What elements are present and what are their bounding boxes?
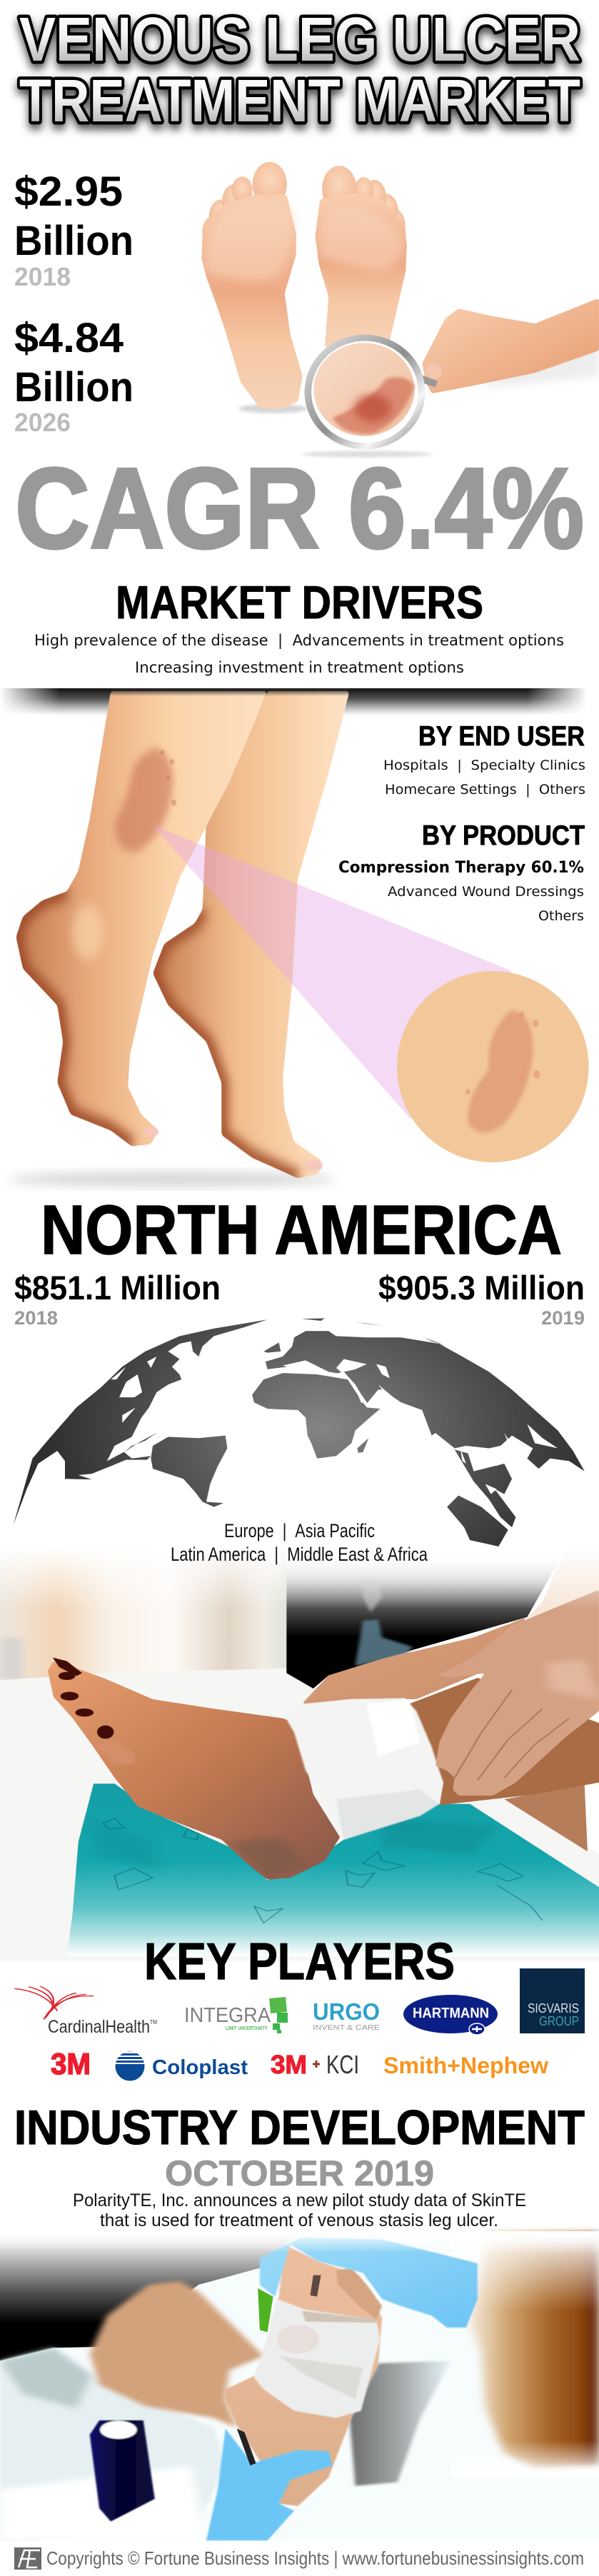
hand underneath [302,1617,527,1704]
dark finger gap [237,2429,256,2465]
illustration: legs with lesion and callout [8,691,589,1187]
logo: hartmann: HARTMANN [413,2006,489,2021]
right leg [153,691,350,1178]
heel blurred [90,2281,263,2427]
logo: smith and nephew: Smith+Nephew [383,2053,548,2078]
logo: urgo: INVENT & CARE [313,2023,380,2032]
photo top fade [0,1547,599,1609]
stat: market size 2026: $4.84 [14,315,124,361]
logo: integra: LIMIT UNCERTAINTY [226,2025,268,2031]
stat: north america 2019: $905.3 Million [378,1269,585,1307]
map: arctic islands [302,1318,447,1347]
upper hand [436,1590,599,1796]
foot sole [226,2244,382,2506]
stat: market size 2026: 2026 [14,408,71,437]
logo: sigvaris group [520,1968,585,2033]
stat: north america 2018 [14,1269,221,1329]
top right arm [527,1549,599,1619]
date: october 2019: OCTOBER 2019 [165,2153,434,2193]
logo: coloplast: Coloplast [152,2056,248,2079]
logo: 3m kci: KCI [326,2050,359,2079]
industry development text [73,2190,526,2230]
logo: cardinal health [14,1986,157,2037]
right leg [409,1678,599,1805]
by product [338,820,585,924]
callout circle with lesion [397,971,589,1162]
bandage roll [90,2420,155,2522]
map: africa [252,1373,380,1459]
left foot [200,162,303,410]
foot [48,1661,340,1880]
market drivers list [34,632,564,676]
logo: cardinal health: CardinalHealth [48,2017,166,2037]
logo: hartmann [403,1995,498,2035]
illustration: feet soles with magnifier and hand [200,162,599,458]
photo: foot with bandage held by hands [0,1547,599,1961]
photo top fade [0,2231,599,2253]
logo: sigvaris group: SIGVARIS [528,2001,579,2016]
toenails [53,1658,114,1739]
right foot [315,166,407,348]
left leg [16,691,268,1147]
lesion on leg [115,748,176,852]
logo: cardinal health: TM [150,2019,157,2026]
heading: key players: KEY PLAYERS [144,1933,455,1991]
dark background [0,2233,298,2361]
regions list [171,1520,428,1565]
gray tray [350,2361,450,2486]
stat: market size 2018: $2.95 [14,168,123,215]
stat: market size 2026: Billion [14,364,134,411]
hand [422,298,599,393]
lower leg [504,1785,588,1851]
logo: urgo: URGO [313,1998,380,2025]
window curtains [0,1549,286,1683]
title [19,5,580,134]
by product: Advanced Wound Dressings [388,884,584,900]
stat: north america 2019: 2019 [541,1307,585,1329]
market drivers list: Increasing investment in treatment options [135,659,464,676]
toes [336,2268,382,2319]
world map globe [14,1318,585,1546]
icon: magnifying glass [304,335,438,449]
map: british isles [263,1342,281,1353]
stat: market size 2026 [14,315,134,437]
teal pillow [67,1783,599,1956]
by end user: Hospitals | Specialty Clinics [383,758,585,773]
callout cone [153,825,512,1119]
white table [0,1669,599,1961]
by product: Others [538,908,584,924]
regions list: Latin America | Middle East & Africa [171,1544,428,1565]
industry development text: that is used for treatment of venous stasis leg ulcer. [100,2210,498,2230]
map: eurasia [266,1331,585,1471]
heading: market drivers: MARKET DRIVERS [116,576,483,628]
stat: market size 2018: 2018 [14,262,71,291]
map: south america [151,1436,227,1507]
by end user: Homecare Settings | Others [385,782,585,798]
gauze bandage [285,1698,443,1840]
logo: integra [184,1997,288,2033]
stat: market size 2018: Billion [14,218,134,264]
map: madagascar [357,1438,368,1453]
logo: 3m kci [271,2050,359,2079]
lower glove [206,2429,333,2540]
logo: integra: INTEGRA [184,2004,271,2027]
dark background wall [286,1549,565,1689]
stat: north america 2018: $851.1 Million [14,1269,221,1307]
footer logo [14,2547,41,2570]
stat: market size 2018 [14,168,134,291]
dressing [254,2299,380,2418]
logo: 3m kci: 3M [271,2050,307,2079]
top shadow over legs [111,688,350,696]
by product: Compression Therapy 60.1% [338,859,584,877]
photo: clinician dressing a foot [0,2231,599,2540]
map: southeast asia [455,1449,515,1527]
upper glove [260,2237,478,2328]
map: australia [447,1496,508,1546]
green object [258,2288,273,2333]
industry development text: PolarityTE, Inc. announces a new pilot study data of SkinTE [73,2190,526,2210]
logo: sigvaris group: GROUP [539,2014,579,2028]
shadow band under drivers panel [0,688,599,715]
stat: north america 2019 [378,1269,585,1329]
logo: coloplast [115,2052,248,2081]
regions list: Europe | Asia Pacific [224,1520,375,1541]
stat: north america 2018: 2018 [14,1307,58,1329]
logo: 3m: 3M [51,2047,91,2081]
map: north america [14,1319,268,1525]
hair [450,2233,599,2477]
base light table [0,2233,599,2540]
by end user [383,721,585,798]
market drivers list: High prevalence of the disease | Advancements in treatment options [34,632,564,650]
map: indonesia islands [474,1464,512,1494]
